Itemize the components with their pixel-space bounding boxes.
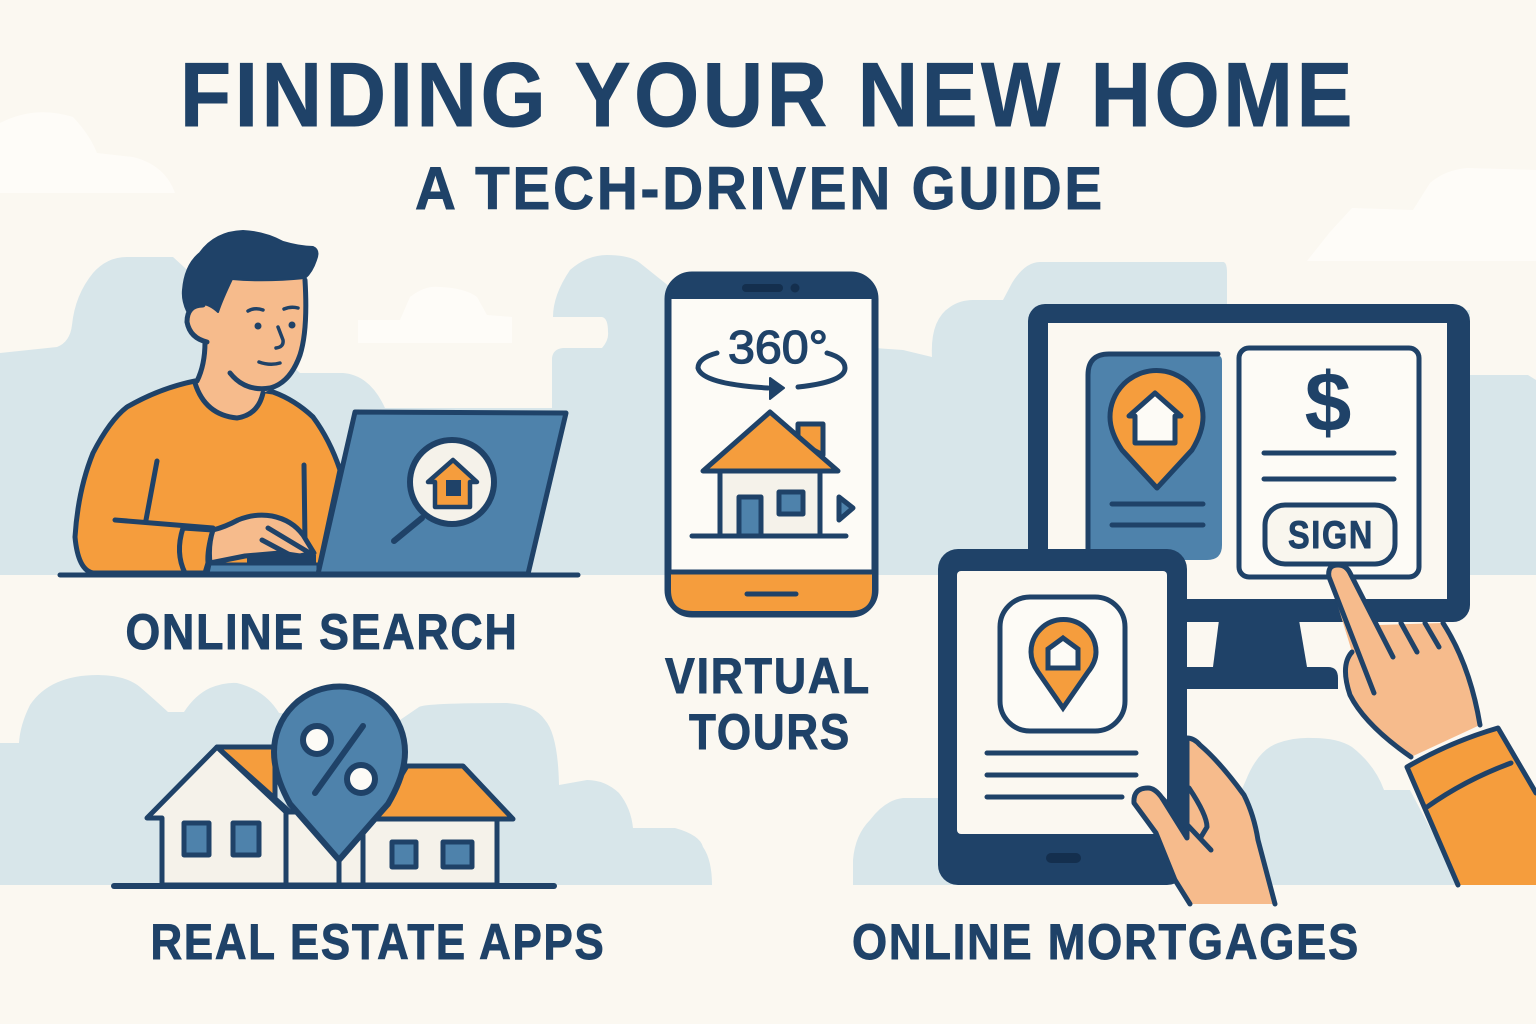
percent pin (274, 686, 405, 860)
laptop (318, 412, 566, 574)
face details (248, 307, 298, 364)
panel: virtual tours (665, 275, 875, 760)
magnifier (394, 440, 494, 541)
panel: real estate apps (114, 686, 606, 970)
tablet (938, 549, 1187, 885)
sleeve (1407, 728, 1536, 885)
rotation arrow (698, 353, 845, 399)
panel: online mortgages (938, 304, 1536, 904)
label: VIRTUAL (665, 648, 871, 704)
sweater (75, 381, 340, 573)
monitor (1028, 304, 1470, 689)
label: ONLINE SEARCH (126, 604, 518, 660)
sign card (1239, 348, 1419, 577)
map card (1088, 354, 1222, 560)
keyboard (208, 564, 318, 573)
pointing hand (1329, 565, 1536, 885)
hand (209, 515, 314, 563)
houses (147, 686, 513, 885)
sign card: SIGN (1288, 514, 1374, 557)
hair (183, 231, 317, 312)
360 label: 360° (728, 321, 828, 373)
label: REAL ESTATE APPS (150, 914, 606, 970)
cuff (179, 528, 213, 573)
phone (668, 275, 875, 614)
subtitle: A TECH-DRIVEN GUIDE (415, 155, 1105, 222)
panel: online search (60, 231, 578, 660)
panel: virtual tours: TOURS (689, 704, 851, 760)
holding hand (1134, 738, 1275, 904)
background clouds (0, 112, 1536, 885)
ear (187, 305, 215, 342)
tablet pin card (1000, 597, 1125, 731)
sign card: $ (1305, 355, 1351, 449)
label: ONLINE MORTGAGES (852, 914, 1360, 970)
house (692, 412, 853, 536)
person illustration (75, 231, 340, 573)
title: FINDING YOUR NEW HOME (180, 45, 1356, 146)
